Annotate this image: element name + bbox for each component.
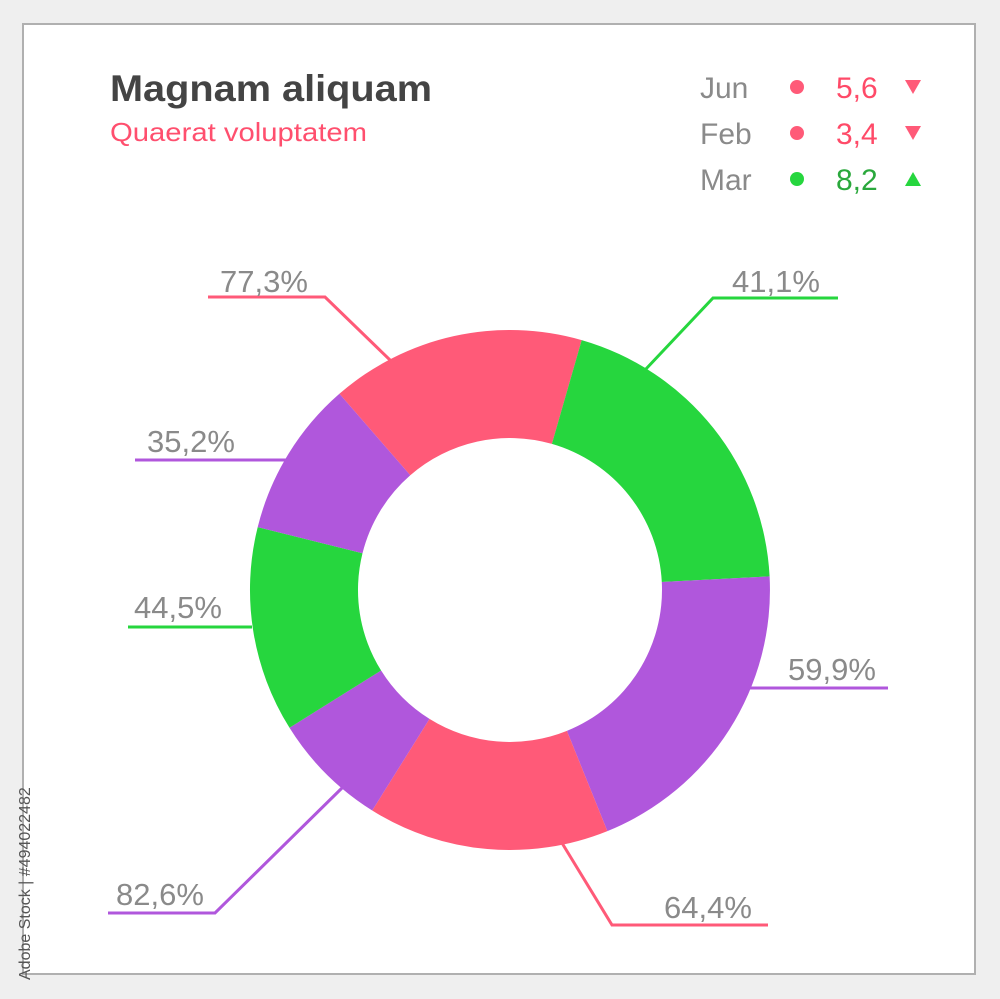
label: 41,1%: 41,1% <box>732 264 820 299</box>
legend <box>700 72 921 197</box>
legend: Mar <box>700 164 752 197</box>
legend: 5,6 <box>836 72 878 105</box>
label: 44,5%: 44,5% <box>134 590 222 625</box>
subtitle: Quaerat voluptatem <box>110 117 367 147</box>
label: 77,3% <box>208 264 390 360</box>
legend: Jun <box>700 72 748 105</box>
legend: 3,4 <box>836 118 878 151</box>
label: 77,3%: 77,3% <box>220 264 308 299</box>
label: 41,1% <box>645 264 838 370</box>
label: 82,6% <box>108 787 343 913</box>
legend: Feb <box>700 118 752 151</box>
label: 82,6%: 82,6% <box>116 877 204 912</box>
donut chart <box>250 330 770 850</box>
label: 64,4%: 64,4% <box>664 890 752 925</box>
label: 35,2%: 35,2% <box>147 424 235 459</box>
vertical stock id: Adobe Stock | #494022482 <box>17 787 34 980</box>
label: 59,9% <box>750 652 888 688</box>
label: 59,9%: 59,9% <box>788 652 876 687</box>
title: Magnam aliquam <box>110 68 432 109</box>
label: 64,4% <box>562 843 768 925</box>
legend: 8,2 <box>836 164 878 197</box>
label: 44,5% <box>128 590 252 627</box>
